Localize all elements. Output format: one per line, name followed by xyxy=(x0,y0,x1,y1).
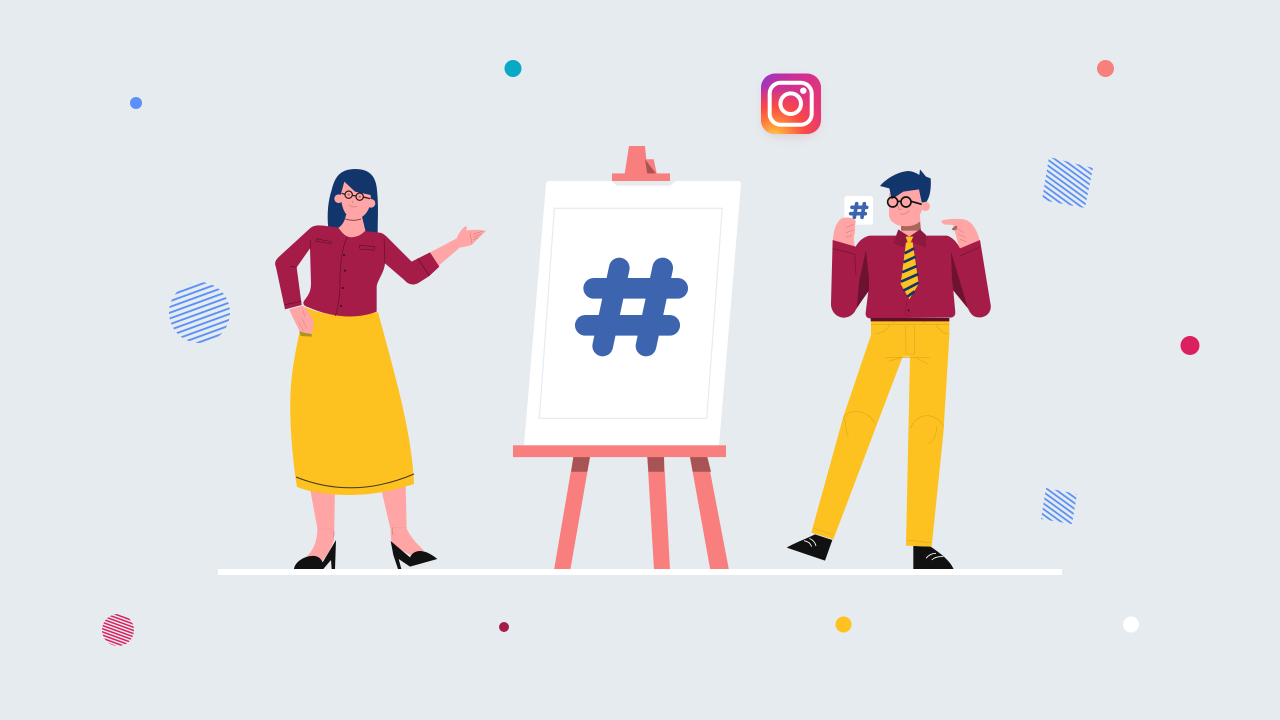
easel with hashtag board xyxy=(513,146,741,570)
man: face xyxy=(889,188,922,226)
woman: glasses xyxy=(342,191,370,200)
man: shirt folds xyxy=(857,250,967,308)
woman: legs and shoes xyxy=(294,485,437,569)
woman: raised hand and forearm xyxy=(428,226,486,266)
man: neck xyxy=(901,215,921,237)
woman: shirt details xyxy=(285,237,429,316)
man: left hand xyxy=(833,217,856,248)
woman: shirt xyxy=(275,225,439,316)
woman xyxy=(275,169,486,569)
man xyxy=(787,169,991,570)
woman: hand shadow xyxy=(299,317,314,337)
man: collar xyxy=(893,229,926,248)
woman: neck xyxy=(337,215,366,239)
woman: skirt xyxy=(290,307,414,495)
striped circle: blue xyxy=(169,282,230,343)
striped square: small blue xyxy=(1041,488,1077,524)
woman: upper body xyxy=(275,169,486,337)
man: trousers and shoes xyxy=(787,320,954,570)
inner frame xyxy=(539,208,722,418)
man: pointing hand xyxy=(941,219,980,250)
icon: instagram logo xyxy=(761,74,821,137)
icon: hashtag xyxy=(585,268,678,346)
woman: waist hand xyxy=(289,306,314,334)
striped circle: crimson xyxy=(102,614,134,646)
decorative dots xyxy=(130,60,1200,632)
man: tie xyxy=(901,237,919,299)
man: hair xyxy=(880,169,931,203)
woman: hair xyxy=(328,169,378,234)
ledge xyxy=(513,445,726,457)
top clamp xyxy=(612,146,670,181)
woman: skirt hem xyxy=(296,474,414,488)
woman: face xyxy=(334,194,343,203)
floor line xyxy=(218,569,1062,575)
man: ear xyxy=(921,202,930,211)
man: shoes xyxy=(787,534,832,561)
man: upper body xyxy=(831,169,991,321)
board xyxy=(524,181,741,446)
man: id card with hashtag xyxy=(844,196,873,225)
man: trousers xyxy=(811,320,949,547)
man: shirt xyxy=(831,236,991,318)
man: belt xyxy=(871,318,949,321)
striped square: large blue xyxy=(1042,157,1093,208)
man: glasses xyxy=(888,197,922,207)
easel legs xyxy=(554,457,729,570)
